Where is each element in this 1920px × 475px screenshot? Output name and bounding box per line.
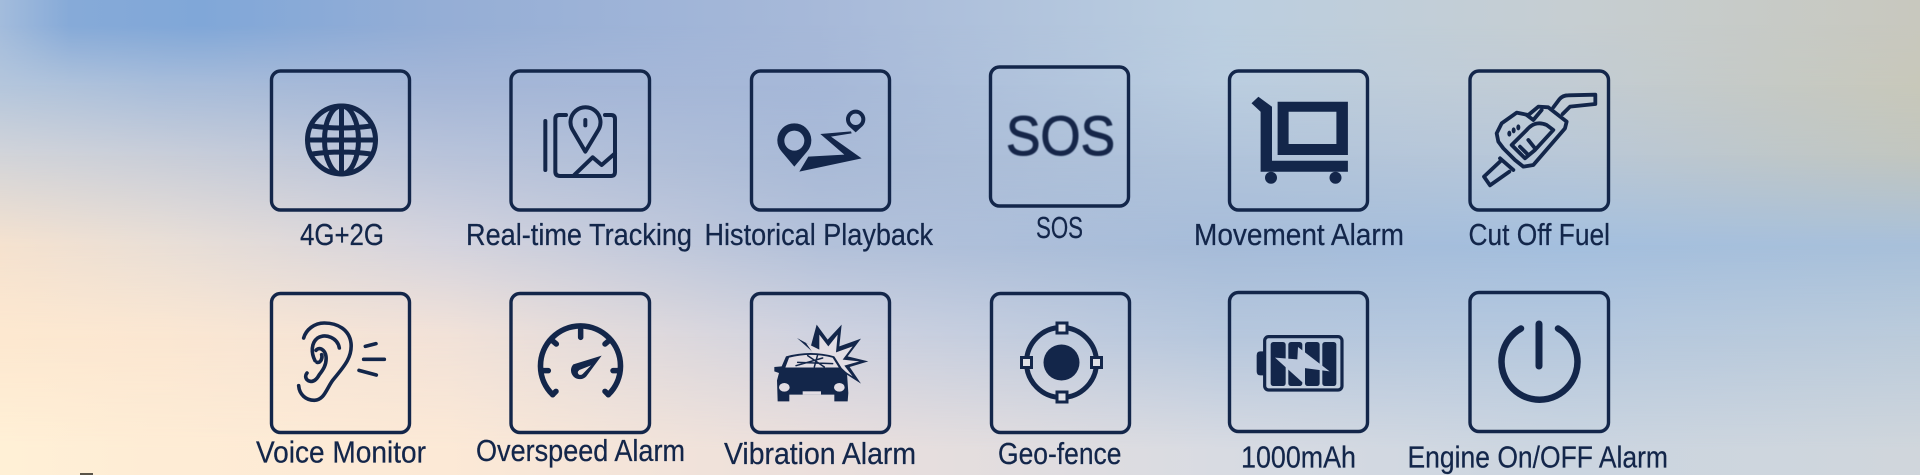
feature: Voice Monitor xyxy=(256,294,426,470)
icon: cart xyxy=(1252,97,1348,184)
label: Movement Alarm xyxy=(1194,217,1404,252)
feature: Movement Alarm xyxy=(1194,71,1404,252)
label: SOS xyxy=(1036,210,1083,245)
icon: route with pins xyxy=(777,110,865,172)
icon: speedometer xyxy=(540,326,620,395)
feature: Engine On/OFF Alarm xyxy=(1408,292,1668,474)
icon: map with pin xyxy=(545,107,615,176)
icon: ear xyxy=(299,323,384,400)
icon: SOS glyphs: SOS xyxy=(1006,104,1115,167)
feature: 1000mAh xyxy=(1230,292,1368,474)
label: 4G+2G xyxy=(300,217,384,252)
icon: globe xyxy=(308,106,376,174)
feature: Overspeed Alarm xyxy=(476,294,685,468)
label: Vibration Alarm xyxy=(724,436,916,471)
feature: Historical Playback xyxy=(704,71,933,252)
icon: crashed car xyxy=(774,325,868,401)
icon: fuel nozzle xyxy=(1484,95,1595,185)
feature: Cut Off Fuel xyxy=(1468,71,1610,252)
label: Voice Monitor xyxy=(256,434,426,470)
label: Cut Off Fuel xyxy=(1468,217,1610,252)
label: Overspeed Alarm xyxy=(476,433,685,468)
feature: Real-time Tracking xyxy=(466,71,692,252)
label: Geo-fence xyxy=(998,436,1122,471)
cropped mark at bottom edge xyxy=(80,473,93,475)
icon: power button xyxy=(1502,324,1578,400)
icon: battery xyxy=(1257,337,1342,390)
label: 1000mAh xyxy=(1241,440,1356,474)
icon: geo-fence target xyxy=(1022,323,1102,402)
feature: 4G+2G xyxy=(272,71,410,252)
label: Engine On/OFF Alarm xyxy=(1408,440,1668,474)
feature: Geo-fence xyxy=(992,294,1130,471)
feature: SOS xyxy=(990,67,1128,245)
feature: Vibration Alarm xyxy=(724,294,916,471)
label: Historical Playback xyxy=(704,217,933,252)
label: Real-time Tracking xyxy=(466,217,692,252)
